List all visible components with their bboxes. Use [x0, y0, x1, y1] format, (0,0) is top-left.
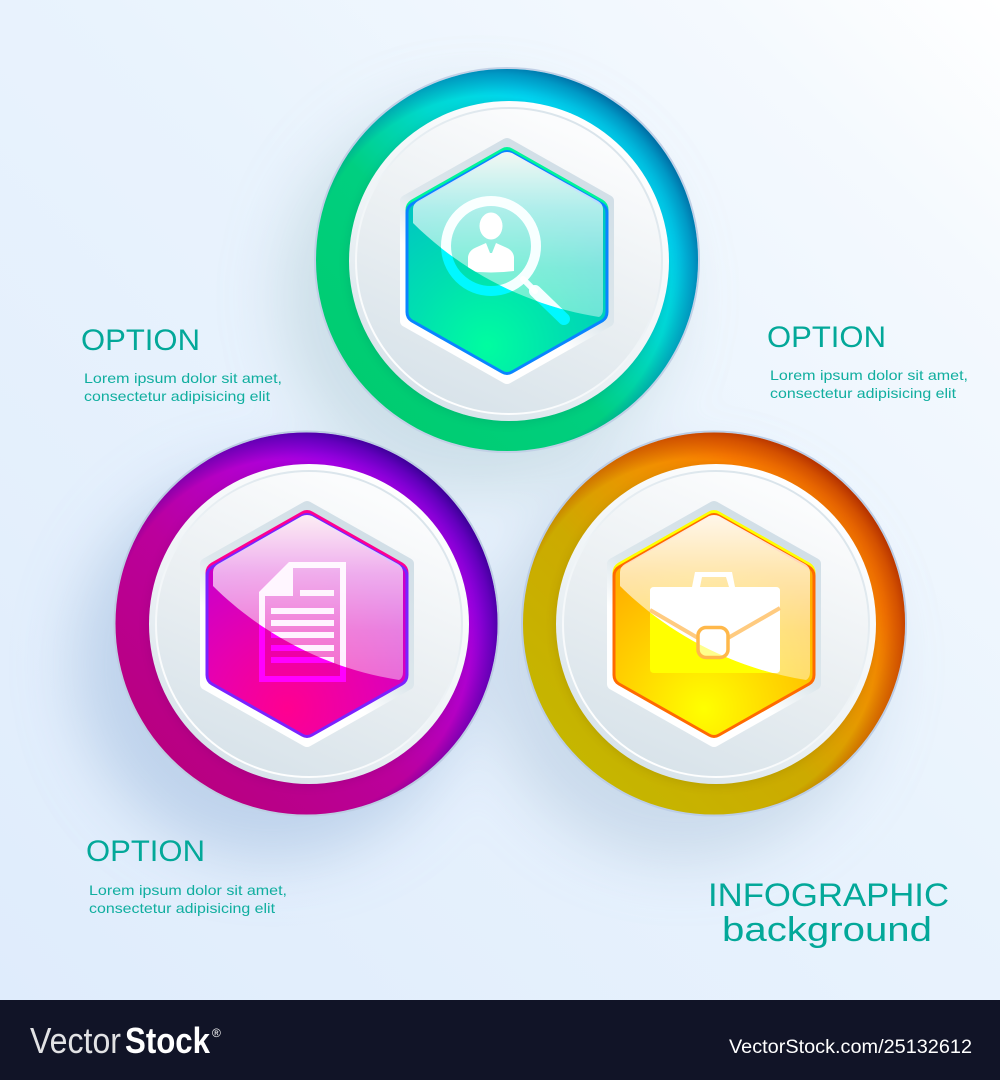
orange hexagon: [613, 507, 815, 741]
gloss: [620, 515, 810, 680]
logo: Vector: [30, 1020, 121, 1061]
icon: briefcase: [650, 572, 780, 673]
description: Lorem ipsum dolor sit amet,: [89, 882, 287, 898]
text block: top right option: [767, 321, 968, 401]
purple hexagon: [206, 507, 408, 741]
title: background: [722, 911, 932, 949]
green ring: [314, 67, 700, 453]
panel: left purple circle: [114, 430, 500, 816]
soft shadows: [76, 101, 878, 860]
green hexagon: [406, 144, 608, 378]
description: consectetur adipisicing elit: [89, 900, 275, 916]
description: Lorem ipsum dolor sit amet,: [770, 367, 968, 383]
icon: magnifier, lower tint: [446, 201, 564, 319]
icon: document: [259, 562, 346, 668]
logo: [30, 1020, 221, 1061]
purple inner disc: [148, 464, 470, 786]
heading: OPTION: [81, 324, 200, 357]
text block: bottom left option: [86, 835, 287, 916]
description: Lorem ipsum dolor sit amet,: [84, 370, 282, 386]
title: INFOGRAPHIC: [708, 877, 949, 913]
description: [84, 370, 282, 404]
icon: magnifying glass with person: [446, 201, 564, 319]
heading: OPTION: [767, 321, 886, 354]
gloss: [213, 515, 403, 680]
text block: top left option: [81, 324, 282, 404]
heading: OPTION: [86, 835, 205, 868]
footer bar: [0, 1000, 1000, 1080]
orange ring: [521, 430, 907, 816]
icon: document, lower tint: [259, 562, 346, 682]
title: [708, 877, 949, 949]
green inner disc: [348, 101, 670, 423]
description: [89, 882, 287, 916]
panel: right orange circle: [521, 430, 907, 816]
panel: top green circle: [314, 67, 700, 453]
logo: ®: [212, 1026, 221, 1040]
logo: Stock: [125, 1020, 211, 1061]
orange inner disc: [555, 464, 877, 786]
purple ring: [114, 430, 500, 816]
image id: VectorStock.com/25132612: [729, 1037, 972, 1058]
description: consectetur adipisicing elit: [770, 385, 956, 401]
gloss: [413, 152, 603, 317]
icon: briefcase, lower tint: [650, 587, 780, 673]
description: [770, 367, 968, 401]
description: consectetur adipisicing elit: [84, 388, 270, 404]
